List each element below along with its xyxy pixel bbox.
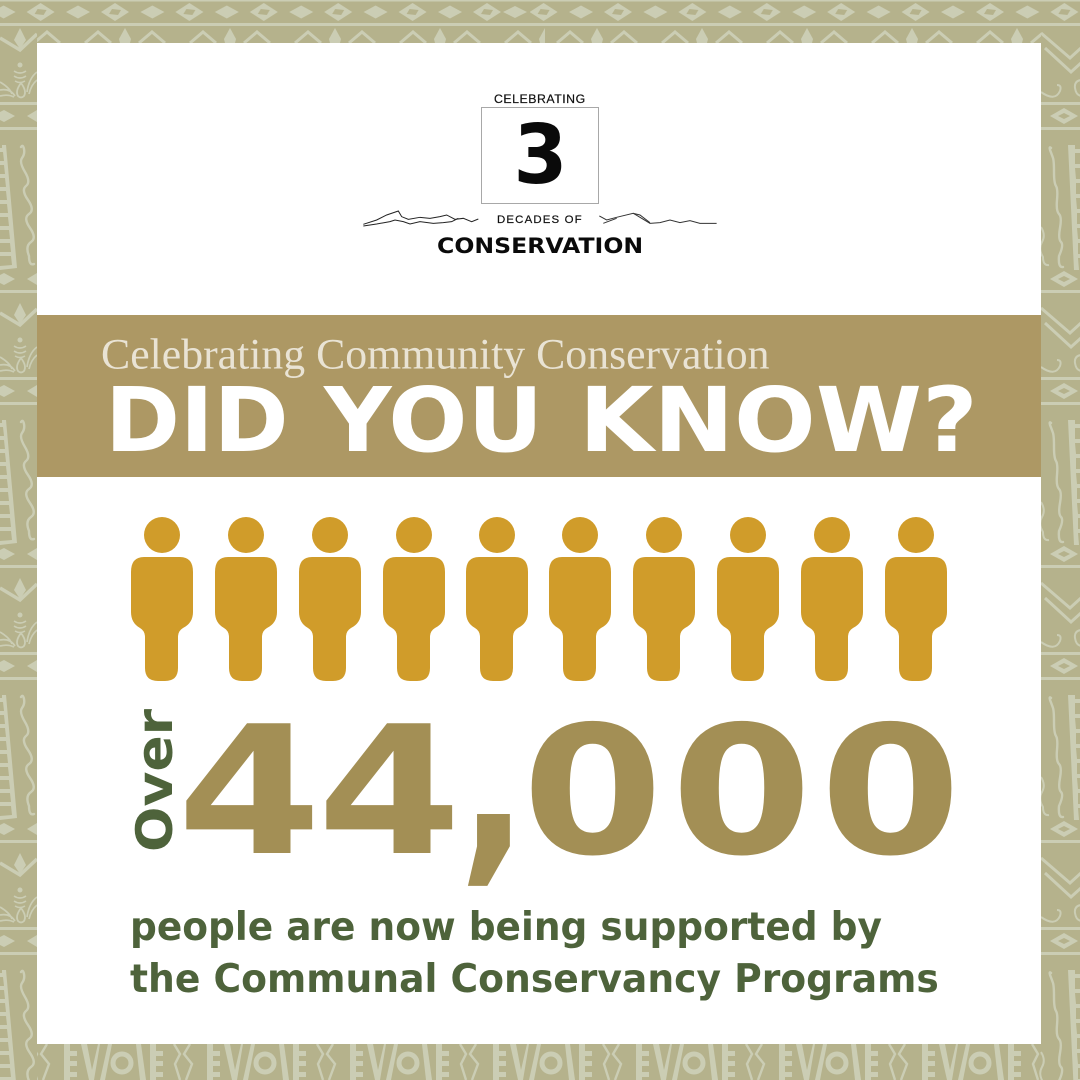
person icon 4 (383, 517, 445, 681)
main heading: KNOW? (579, 368, 978, 472)
big number: 4 (317, 687, 462, 895)
person icon 5 (466, 517, 528, 681)
person icon 1 (131, 517, 193, 681)
person icon 7 (633, 517, 695, 681)
big number: , (458, 653, 529, 906)
row of ten people icons (131, 517, 947, 681)
big number: 0 (522, 688, 663, 895)
person icon 8 (717, 517, 779, 681)
person icon 2 (215, 517, 277, 681)
person icon 3 (299, 517, 361, 681)
main heading: DID (105, 369, 289, 473)
heading band (37, 315, 1041, 477)
big number: 0 (671, 688, 812, 895)
logo: right mountain line (599, 213, 717, 223)
logo: left mountain line (363, 211, 478, 226)
big number: 4 (177, 687, 322, 895)
person icon 9 (801, 517, 863, 681)
person icon 10 (885, 517, 947, 681)
main heading (105, 368, 978, 473)
big number: 0 (820, 688, 961, 895)
logo: celebrating label: CELEBRATING (494, 92, 586, 106)
person icon 6 (549, 517, 611, 681)
logo: conservation wordmark: CONSERVATION (437, 234, 643, 259)
logo: celebrating 3 decades of conservation (363, 92, 717, 259)
logo: number box (482, 108, 598, 204)
band background (37, 315, 1041, 477)
main heading: YOU (323, 368, 543, 473)
logo: decades of label: DECADES OF (497, 214, 583, 226)
description line 2: the Communal Conservancy Programs (130, 956, 939, 1002)
subtitle: Celebrating Community Conservation (101, 331, 770, 378)
logo: numeral 3: 3 (514, 107, 567, 202)
description text (130, 904, 939, 1002)
rotated label: over: Over (127, 709, 185, 852)
big number (177, 653, 961, 906)
description line 1: people are now being supported by (130, 904, 882, 950)
